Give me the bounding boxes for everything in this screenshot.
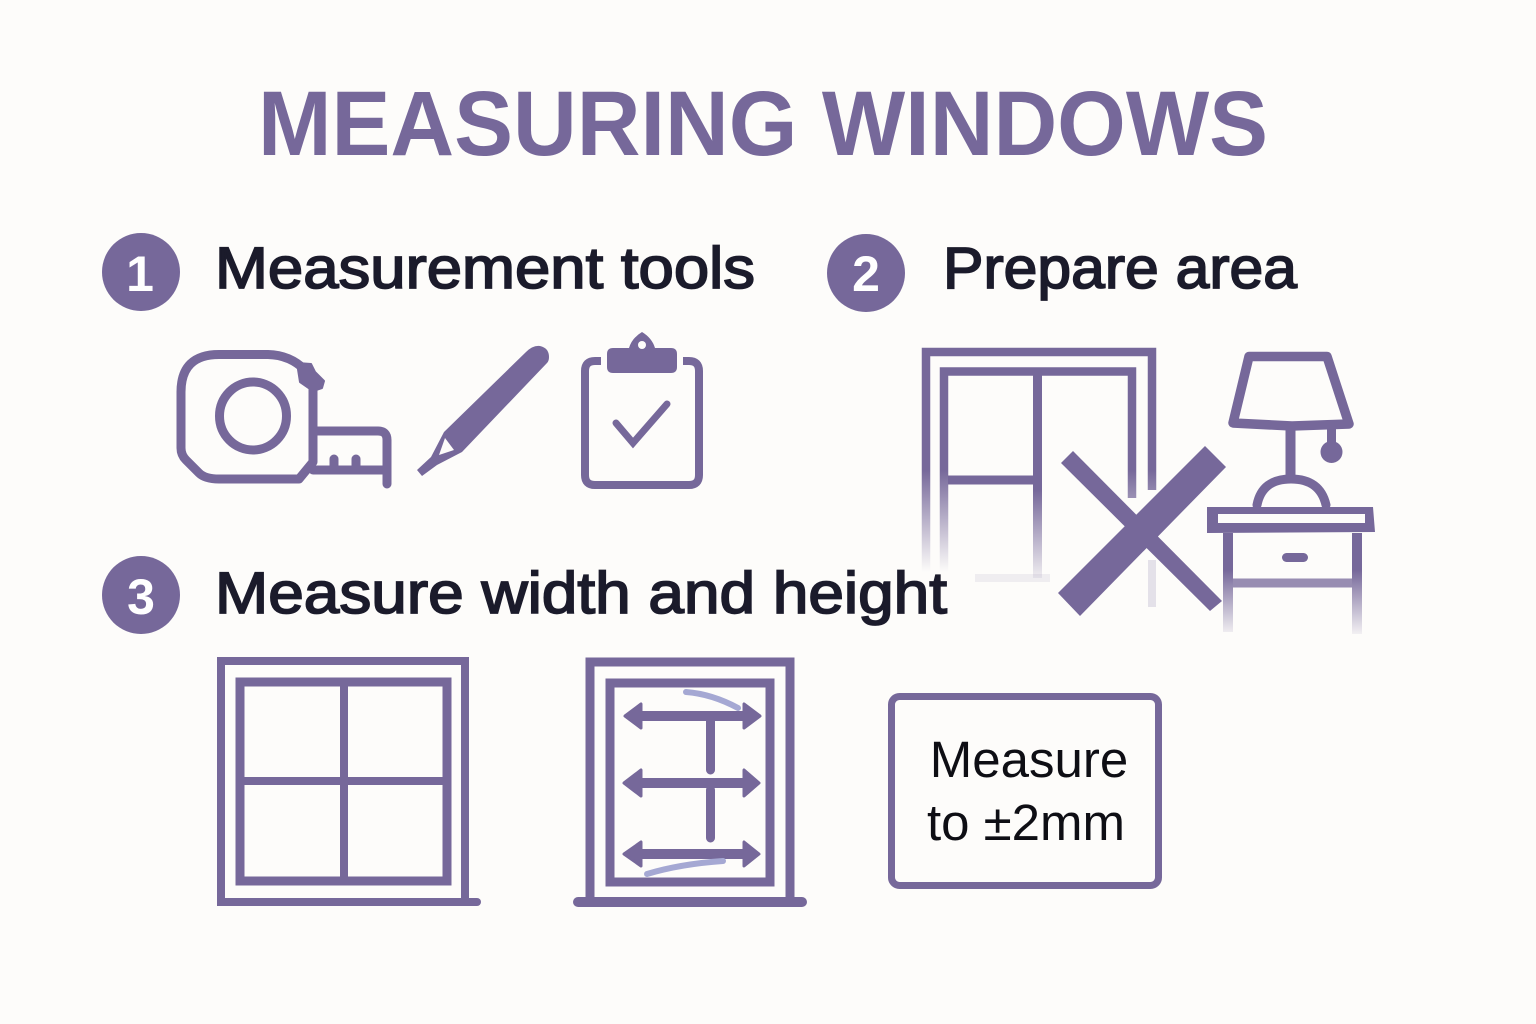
step 3 heading: Measure width and height [215, 561, 947, 626]
icon: lamp and nightstand [1207, 356, 1375, 634]
icon: four-pane window [221, 661, 477, 902]
icon: pencil [417, 346, 549, 476]
step 3 heading [102, 556, 947, 634]
step 3 heading: 3 [127, 569, 155, 625]
callout: measure to 2mm: to ±2mm [927, 794, 1125, 851]
step 2 heading: Prepare area [943, 236, 1298, 301]
step 1 heading: Measurement tools [215, 236, 755, 301]
step 2 heading [827, 234, 1298, 312]
icon: window with measuring arrows [578, 662, 802, 902]
icon: cross out [1058, 446, 1226, 616]
callout: measure to 2mm [892, 696, 1158, 886]
step 1 heading: 1 [126, 246, 154, 302]
icon: tape measure [181, 354, 387, 484]
step 1 heading [102, 233, 755, 311]
title: MEASURING WINDOWS [258, 73, 1268, 175]
icon: window to clear [926, 352, 1152, 607]
callout: measure to 2mm: Measure [930, 731, 1128, 788]
step 2 heading: 2 [852, 246, 880, 302]
icon: clipboard with check [585, 332, 699, 485]
